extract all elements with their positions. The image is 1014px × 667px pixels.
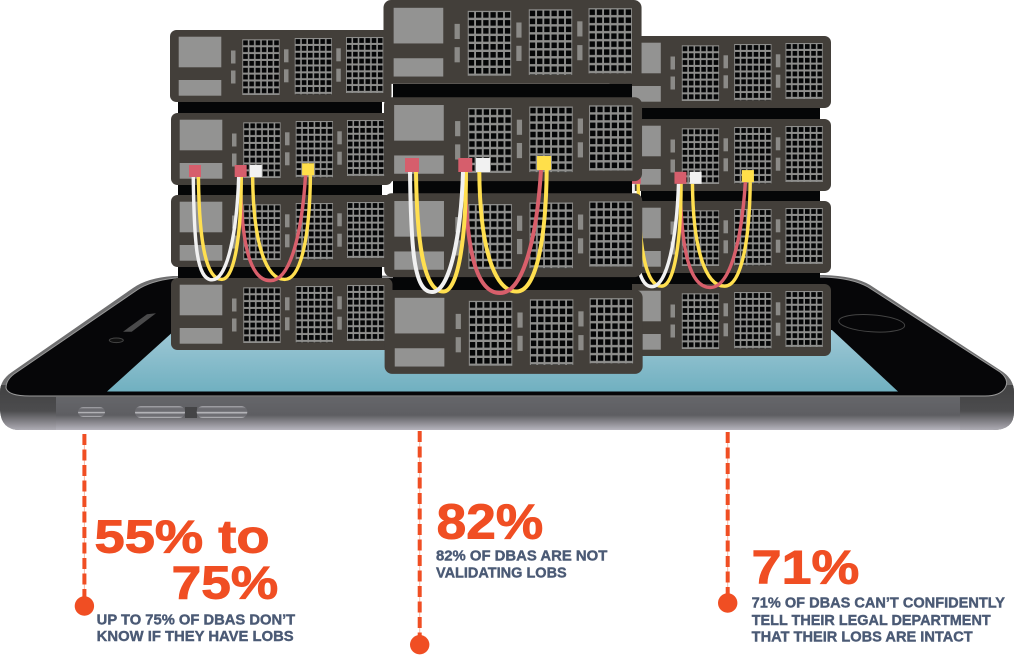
description (436, 549, 607, 582)
callout: 55% to 75%: 75% (172, 556, 278, 608)
phone home button (838, 313, 905, 334)
phone speaker (123, 313, 156, 332)
phone display (107, 330, 898, 392)
server stack: center (384, 0, 643, 374)
cables: center (405, 156, 551, 293)
stat: 82% (437, 496, 543, 550)
description: VALIDATING LOBS (436, 566, 567, 582)
server stack: right (610, 36, 831, 356)
description: THAT THEIR LOBS ARE INTACT (752, 630, 973, 646)
dashed leader line (410, 431, 429, 654)
cables: right (629, 170, 754, 288)
stat: 55% to (94, 511, 270, 563)
stat: 71% (752, 540, 859, 593)
description: 82% OF DBAS ARE NOT (436, 549, 607, 565)
callout: 82% (410, 431, 607, 654)
server stack: left (170, 30, 392, 350)
callout: 71% (718, 432, 1005, 646)
callout: 55% to 75% (75, 434, 295, 645)
phone side buttons (78, 406, 247, 418)
phone camera (109, 338, 123, 343)
dashed leader line (75, 434, 94, 616)
phone body (0, 270, 1014, 435)
description: TELL THEIR LEGAL DEPARTMENT (752, 613, 991, 629)
phone (0, 270, 1014, 435)
description (97, 612, 295, 645)
cables: left (189, 163, 314, 281)
description: UP TO 75% OF DBAS DON’T (97, 612, 295, 628)
phone screen bezel (6, 277, 1007, 396)
description: KNOW IF THEY HAVE LOBS (97, 629, 294, 645)
description (752, 596, 1005, 646)
dashed leader line (718, 432, 737, 613)
description: 71% OF DBAS CAN’T CONFIDENTLY (752, 596, 1005, 612)
